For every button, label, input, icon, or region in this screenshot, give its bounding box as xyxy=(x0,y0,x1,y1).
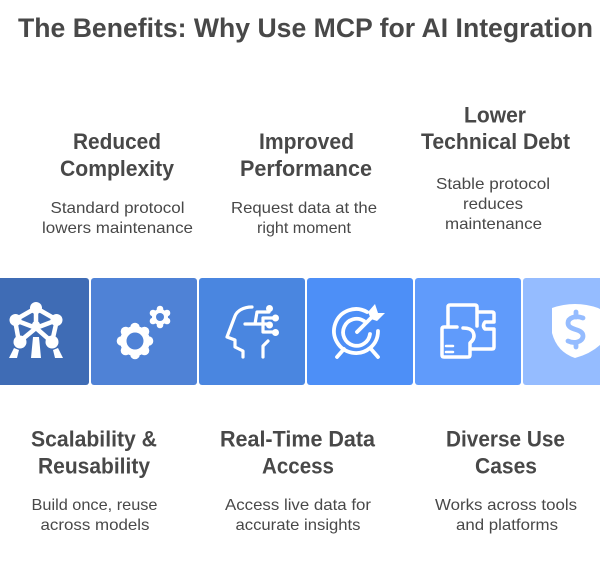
heading: scalability and reusability xyxy=(31,426,157,478)
block: real-time data access xyxy=(220,426,376,534)
icon: puzzle xyxy=(442,305,494,357)
heading: reduced complexity: Complexity xyxy=(60,156,175,181)
heading: reduced complexity: Reduced xyxy=(73,129,161,154)
description: real-time data access: Access live data for xyxy=(225,497,372,514)
description: lower technical debt xyxy=(436,176,550,233)
description: improved performance xyxy=(231,200,377,237)
panel: diverse use cases xyxy=(523,278,600,385)
heading: scalability and reusability: Scalability & xyxy=(31,426,157,452)
description: reduced complexity xyxy=(42,200,193,237)
description: improved performance: Request data at the xyxy=(231,200,377,217)
description: real-time data access xyxy=(225,497,372,534)
description: lower technical debt: Stable protocol xyxy=(436,176,550,193)
description: scalability and reusability xyxy=(32,497,158,534)
block: scalability and reusability xyxy=(31,426,158,534)
block: diverse use cases xyxy=(435,426,577,534)
heading: real-time data access: Real-Time Data xyxy=(220,426,376,452)
heading: diverse use cases: Cases xyxy=(475,454,537,478)
icon: shield with dollar xyxy=(552,304,600,358)
heading: improved performance xyxy=(240,129,372,181)
description: reduced complexity: lowers maintenance xyxy=(42,220,193,237)
panel: lower technical debt xyxy=(415,278,521,385)
heading: improved performance: Improved xyxy=(259,129,354,154)
description: diverse use cases xyxy=(435,497,577,534)
block: lower technical debt xyxy=(421,102,571,233)
heading: lower technical debt: Lower xyxy=(464,102,526,128)
description: lower technical debt: reduces xyxy=(463,196,523,213)
panel: scalability xyxy=(0,278,89,385)
icon: target xyxy=(334,304,385,357)
description: improved performance: right moment xyxy=(257,220,352,237)
heading: diverse use cases: Diverse Use xyxy=(446,426,565,452)
description: lower technical debt: maintenance xyxy=(445,216,542,233)
description: scalability and reusability: Build once, reuse xyxy=(32,497,158,514)
block: improved performance xyxy=(231,129,377,237)
heading: real-time data access xyxy=(220,426,376,478)
panel: real-time data xyxy=(307,278,413,385)
description: diverse use cases: and platforms xyxy=(456,517,558,534)
heading: lower technical debt: Technical Debt xyxy=(421,129,571,154)
heading: scalability and reusability: Reusability xyxy=(38,454,151,478)
heading: lower technical debt xyxy=(421,102,571,154)
description: reduced complexity: Standard protocol xyxy=(50,200,184,217)
heading: improved performance: Performance xyxy=(240,156,372,181)
icon: atomium xyxy=(9,302,63,358)
description: diverse use cases: Works across tools xyxy=(435,497,577,514)
description: scalability and reusability: across models xyxy=(40,517,150,534)
heading: reduced complexity xyxy=(60,129,175,181)
description: real-time data access: accurate insights xyxy=(236,517,360,534)
icon: head with nodes xyxy=(227,305,279,357)
panel: reduced complexity xyxy=(91,278,197,385)
heading: real-time data access: Access xyxy=(262,454,334,478)
block: reduced complexity xyxy=(42,129,193,237)
icon: gears xyxy=(117,306,170,359)
heading: diverse use cases xyxy=(446,426,565,478)
title: The Benefits: Why Use MCP for AI Integration xyxy=(18,13,593,43)
panel: improved performance xyxy=(199,278,305,385)
